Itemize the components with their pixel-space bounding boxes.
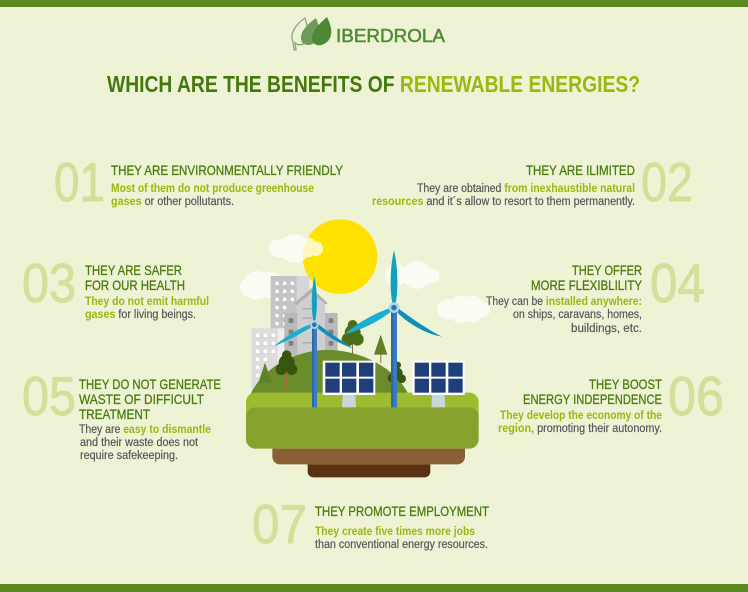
solar panel right [412, 361, 465, 409]
benefit 05: TREATMENT [79, 406, 150, 422]
benefit 07: They create five times more jobs [315, 526, 475, 538]
illustration: wind turbines, solar panels and city on floating island [240, 219, 490, 477]
dark soil layer [308, 464, 430, 477]
benefit 01: 01 [54, 151, 105, 213]
benefit 04: buildings, etc. [571, 323, 642, 335]
benefit 04: MORE FLEXIBLILITY [531, 277, 643, 293]
benefit 03: 03 [22, 252, 76, 314]
benefit 07: than conventional energy resources. [315, 539, 488, 551]
benefit 05: 05 [22, 365, 76, 427]
tree behind hill [342, 320, 364, 360]
benefit 05: and their waste does not [80, 437, 199, 449]
benefit 06: They develop the economy of the [500, 410, 662, 422]
solar panel left [323, 361, 375, 409]
icon: sun [303, 219, 377, 294]
clouds [240, 234, 490, 323]
benefit 07: 07 [252, 493, 307, 555]
title: WHICH ARE THE BENEFITS OF RENEWABLE ENERGIES? [107, 71, 640, 97]
benefit 01: Most of them do not produce greenhouse [111, 183, 314, 195]
trees on hill [258, 350, 406, 392]
benefit 04: They can be installed anywhere: [486, 296, 642, 308]
benefit 06: ENERGY INDEPENDENCE [523, 391, 662, 407]
benefit 06 [498, 365, 724, 435]
benefit 01: THEY ARE ENVIRONMENTALLY FRIENDLY [111, 162, 344, 178]
logo: Iberdrola: IBERDROLA [336, 25, 446, 46]
benefit 02: They are obtained from inexhaustible natural [417, 183, 635, 195]
benefit 02: THEY ARE ILIMITED [526, 162, 635, 178]
pine tree [374, 335, 387, 363]
wind turbine large [345, 251, 442, 409]
benefit 04 [486, 252, 705, 335]
benefit 07: THEY PROMOTE EMPLOYMENT [315, 503, 489, 519]
wind turbine small [274, 277, 353, 409]
benefit 04: 04 [650, 252, 705, 314]
benefit 03: They do not emit harmful [85, 296, 209, 308]
soil layer [272, 449, 465, 464]
benefit 05: They are easy to dismantle [79, 424, 211, 436]
benefit 01: gases or other pollutants. [111, 196, 234, 208]
city buildings [252, 276, 338, 392]
ground: front layer [246, 407, 479, 449]
hill [251, 350, 408, 394]
ground: back layer [246, 393, 479, 433]
benefit 02 [372, 151, 693, 213]
benefit 05: WASTE OF DIFFICULT [79, 391, 204, 407]
benefit 04: THEY OFFER [572, 262, 642, 278]
benefit 07 [252, 493, 489, 555]
benefit 03 [22, 252, 209, 321]
benefit 03: THEY ARE SAFER [85, 262, 182, 278]
benefit 06: region, promoting their autonomy. [498, 423, 662, 435]
benefit 05: require safekeeping. [80, 450, 178, 462]
benefit 06: 06 [668, 365, 724, 427]
benefit 04: on ships, caravans, homes, [513, 309, 642, 321]
benefit 05: THEY DO NOT GENERATE [79, 376, 221, 392]
benefit 06: THEY BOOST [589, 376, 662, 392]
benefit 03: gases for living beings. [85, 309, 196, 321]
logo: Iberdrola [292, 17, 446, 50]
benefit 02: resources and it´s allow to resort to them permanently. [372, 196, 635, 208]
benefit 02: 02 [641, 151, 693, 213]
benefit 05 [22, 365, 221, 462]
benefit 03: FOR OUR HEALTH [85, 277, 185, 293]
benefit 01 [54, 151, 344, 213]
